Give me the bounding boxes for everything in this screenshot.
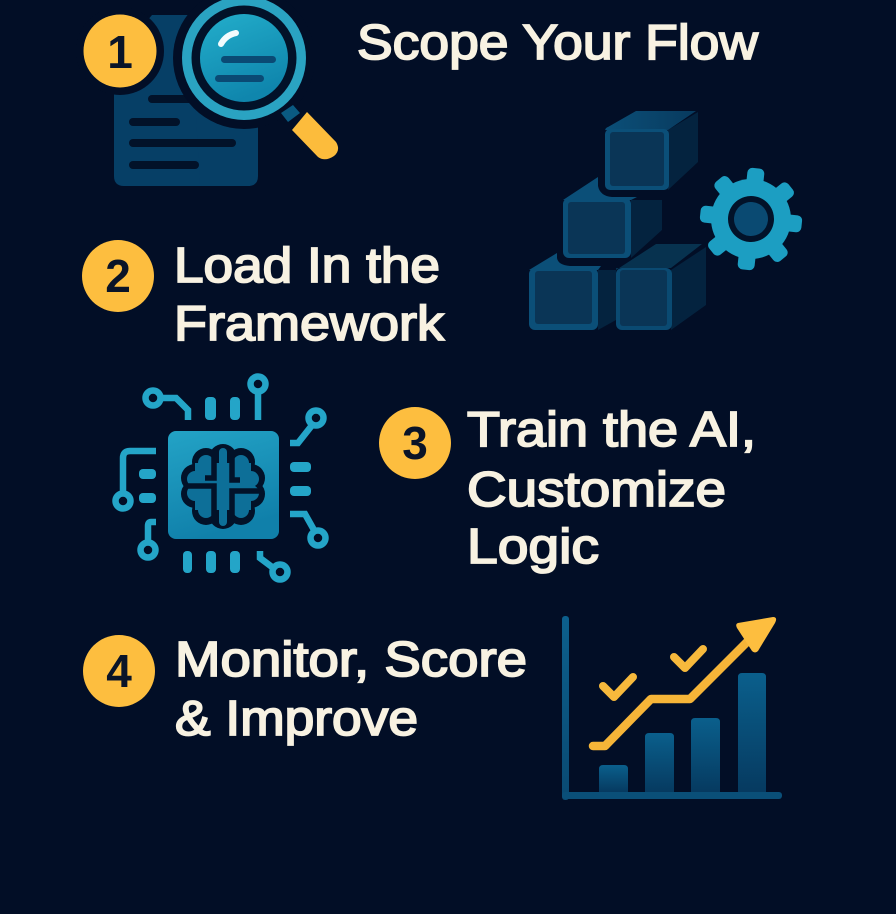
check marks [603,649,703,697]
heading: step 4: & Improve [175,692,418,746]
icon: growth chart [562,616,782,800]
heading: step 4 [175,633,527,746]
badge 3: 3 [402,417,428,469]
gear [695,163,807,275]
heading: step 3: Logic [467,520,599,574]
trend arrow [593,617,776,746]
middle block [563,177,662,258]
icon: blocks and gear [529,111,807,330]
magnifying glass [173,0,338,159]
badge 4: 4 [106,645,132,697]
chip pins [139,397,311,573]
badge 4 [83,635,155,707]
bars [599,673,766,792]
axes [562,616,782,800]
lower right block [616,244,706,330]
icon: document with magnifying glass [114,0,338,186]
heading: step 3: Train the AI, [467,403,756,457]
heading: step 2: Load In the [174,239,440,293]
badge 2 [82,240,154,312]
document [114,15,258,186]
heading: step 2 [174,239,445,351]
top block [605,111,698,190]
heading: step 3 [467,403,756,574]
heading: step 1: Scope Your Flow [357,16,759,70]
heading: step 2: Framework [174,297,445,351]
badge 3 [379,407,451,479]
heading: step 4: Monitor, Score [175,633,527,687]
icon: AI chip with brain [116,376,326,580]
circuit traces [116,376,326,580]
heading: step 3: Customize [467,463,726,517]
brain [181,444,265,529]
chip body [168,431,279,539]
lower left block [529,253,616,330]
badge 2: 2 [105,250,131,302]
badge 1 [76,7,164,95]
badge 1: 1 [107,26,133,78]
